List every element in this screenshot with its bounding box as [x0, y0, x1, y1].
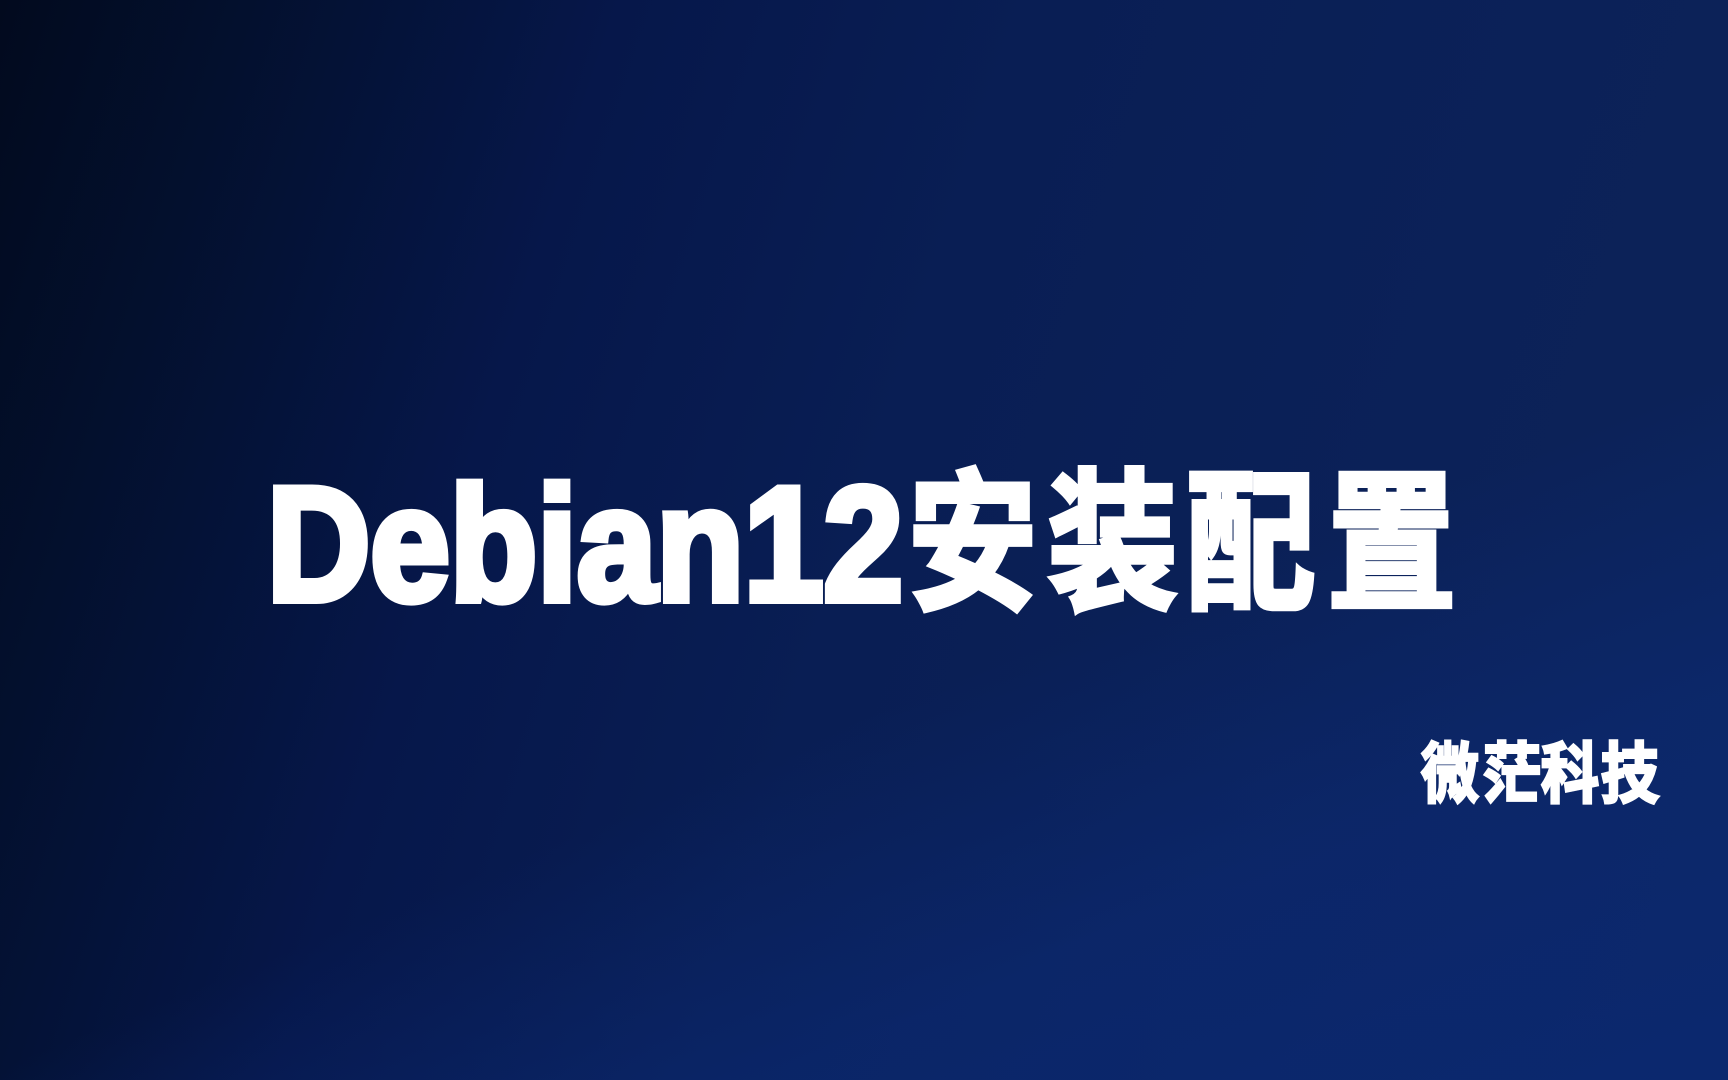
author label: 科	[1541, 739, 1599, 812]
title	[267, 454, 1456, 635]
title chinese part: 安	[908, 459, 1037, 629]
title chinese part	[908, 459, 1456, 629]
author label: 技	[1601, 739, 1659, 812]
author label: 微	[1421, 739, 1479, 812]
title chinese part: 置	[1327, 459, 1456, 629]
title chinese part: 配	[1186, 459, 1315, 629]
title chinese part: 装	[1048, 459, 1177, 629]
title latin part: Debian12	[267, 454, 903, 635]
author label	[1421, 739, 1659, 812]
author label: 茫	[1483, 739, 1541, 812]
